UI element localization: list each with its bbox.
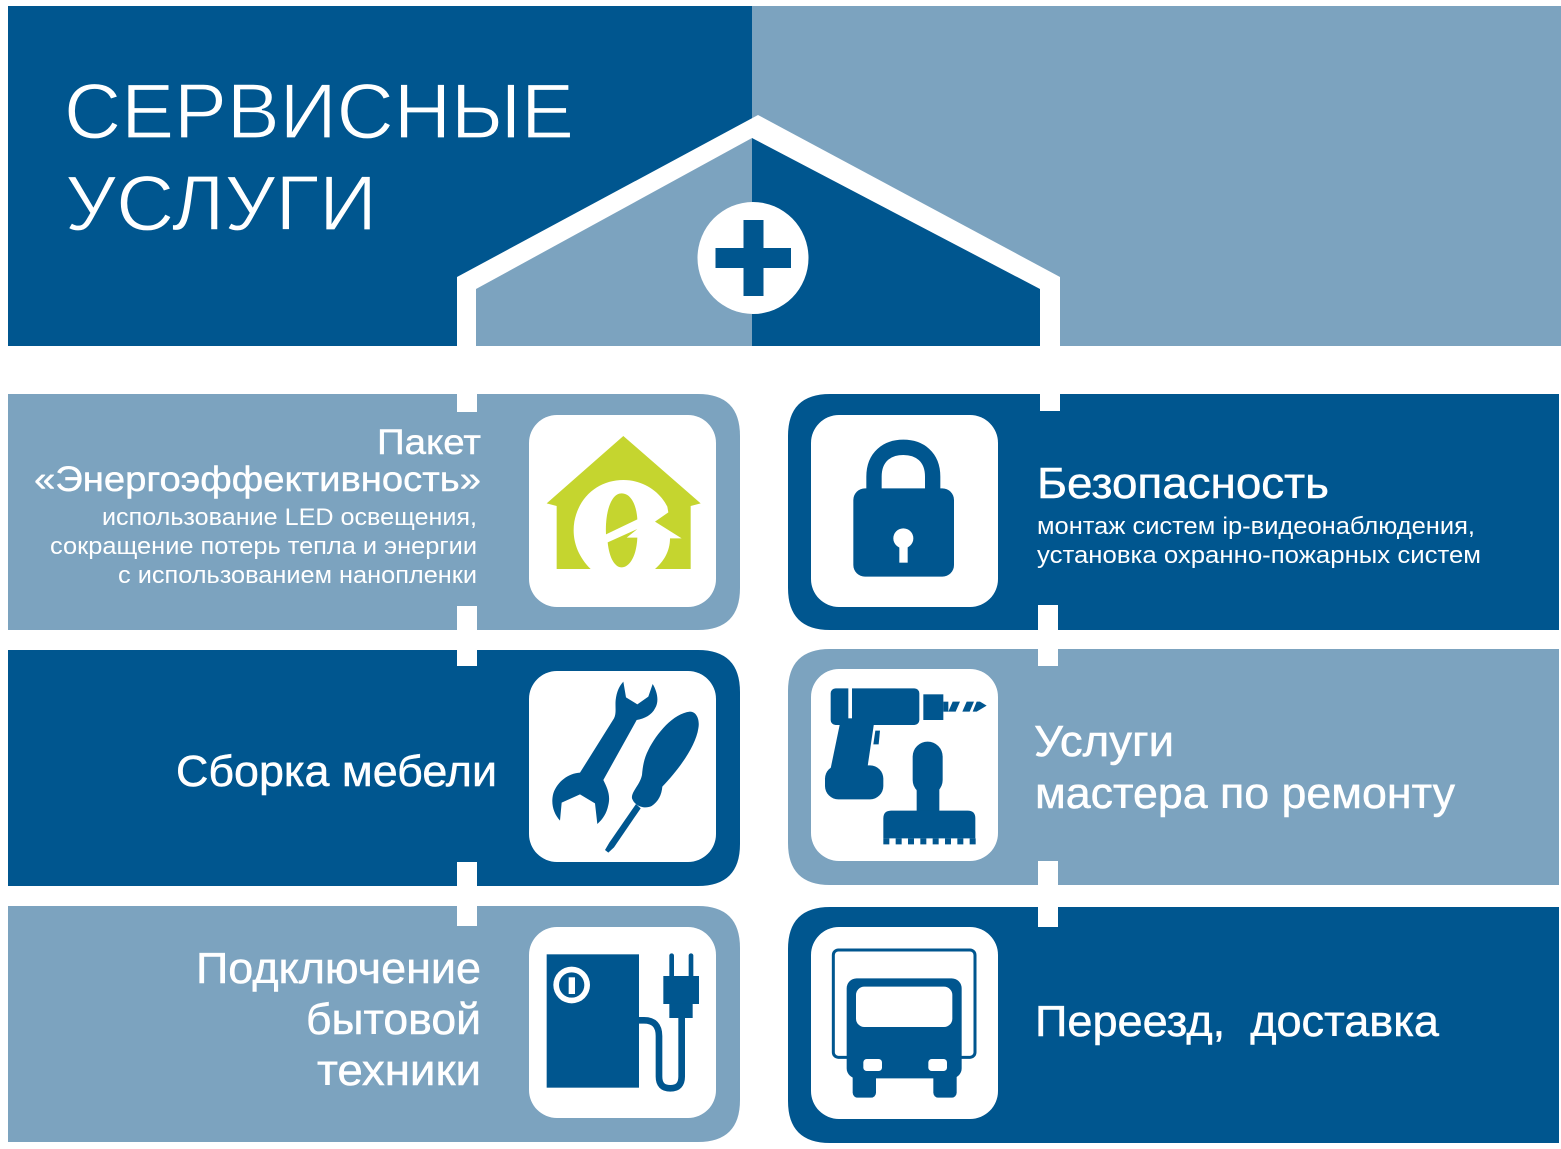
text: appliances: техники xyxy=(317,1046,481,1095)
icon: drill and trowel xyxy=(811,669,998,861)
icon: appliance with plug xyxy=(529,927,716,1118)
text: energy package: использование LED освещения, xyxy=(102,504,477,531)
text: security xyxy=(1037,459,1481,569)
panel: security xyxy=(788,394,1559,630)
icon: truck xyxy=(811,927,998,1119)
text: furniture assembly: Сборка мебели xyxy=(176,747,497,796)
text: energy package: сокращение потерь тепла и энергии xyxy=(50,533,477,560)
title xyxy=(64,67,574,247)
house outline with roof xyxy=(457,115,1060,346)
text: energy package xyxy=(34,423,481,589)
panel: header background xyxy=(8,6,1561,346)
panel: moving and delivery xyxy=(788,907,1559,1143)
text: appliances xyxy=(196,944,481,1095)
icon: wrench and screwdriver xyxy=(529,671,716,862)
panel: repair master xyxy=(788,649,1559,885)
title: СЕРВИСНЫЕ xyxy=(64,67,574,155)
text: energy package: Пакет xyxy=(377,423,481,462)
text: appliances: Подключение xyxy=(196,944,481,993)
text: repair master: Услуги xyxy=(1034,717,1174,766)
text: security: монтаж систем ip-видеонаблюдения, xyxy=(1037,513,1475,540)
text: energy package: с использованием нанопленки xyxy=(118,562,477,589)
text: security: установка охранно-пожарных систем xyxy=(1037,542,1481,569)
text: appliances: бытовой xyxy=(306,995,481,1044)
panel: energy efficiency xyxy=(8,394,740,630)
text: security: Безопасность xyxy=(1037,459,1329,508)
text: energy package: «Энергоэффективность» xyxy=(34,460,481,499)
panel: furniture assembly xyxy=(8,650,740,886)
title: УСЛУГИ xyxy=(65,159,377,247)
icon: padlock xyxy=(811,415,998,607)
text: repair master: мастера по ремонту xyxy=(1035,769,1455,818)
icon: energy house xyxy=(529,415,716,607)
panel: appliances xyxy=(8,906,740,1142)
icon: medical cross xyxy=(698,202,808,314)
text: repair master xyxy=(1034,717,1455,818)
text: moving and delivery: Переезд, доставка xyxy=(1035,997,1440,1046)
